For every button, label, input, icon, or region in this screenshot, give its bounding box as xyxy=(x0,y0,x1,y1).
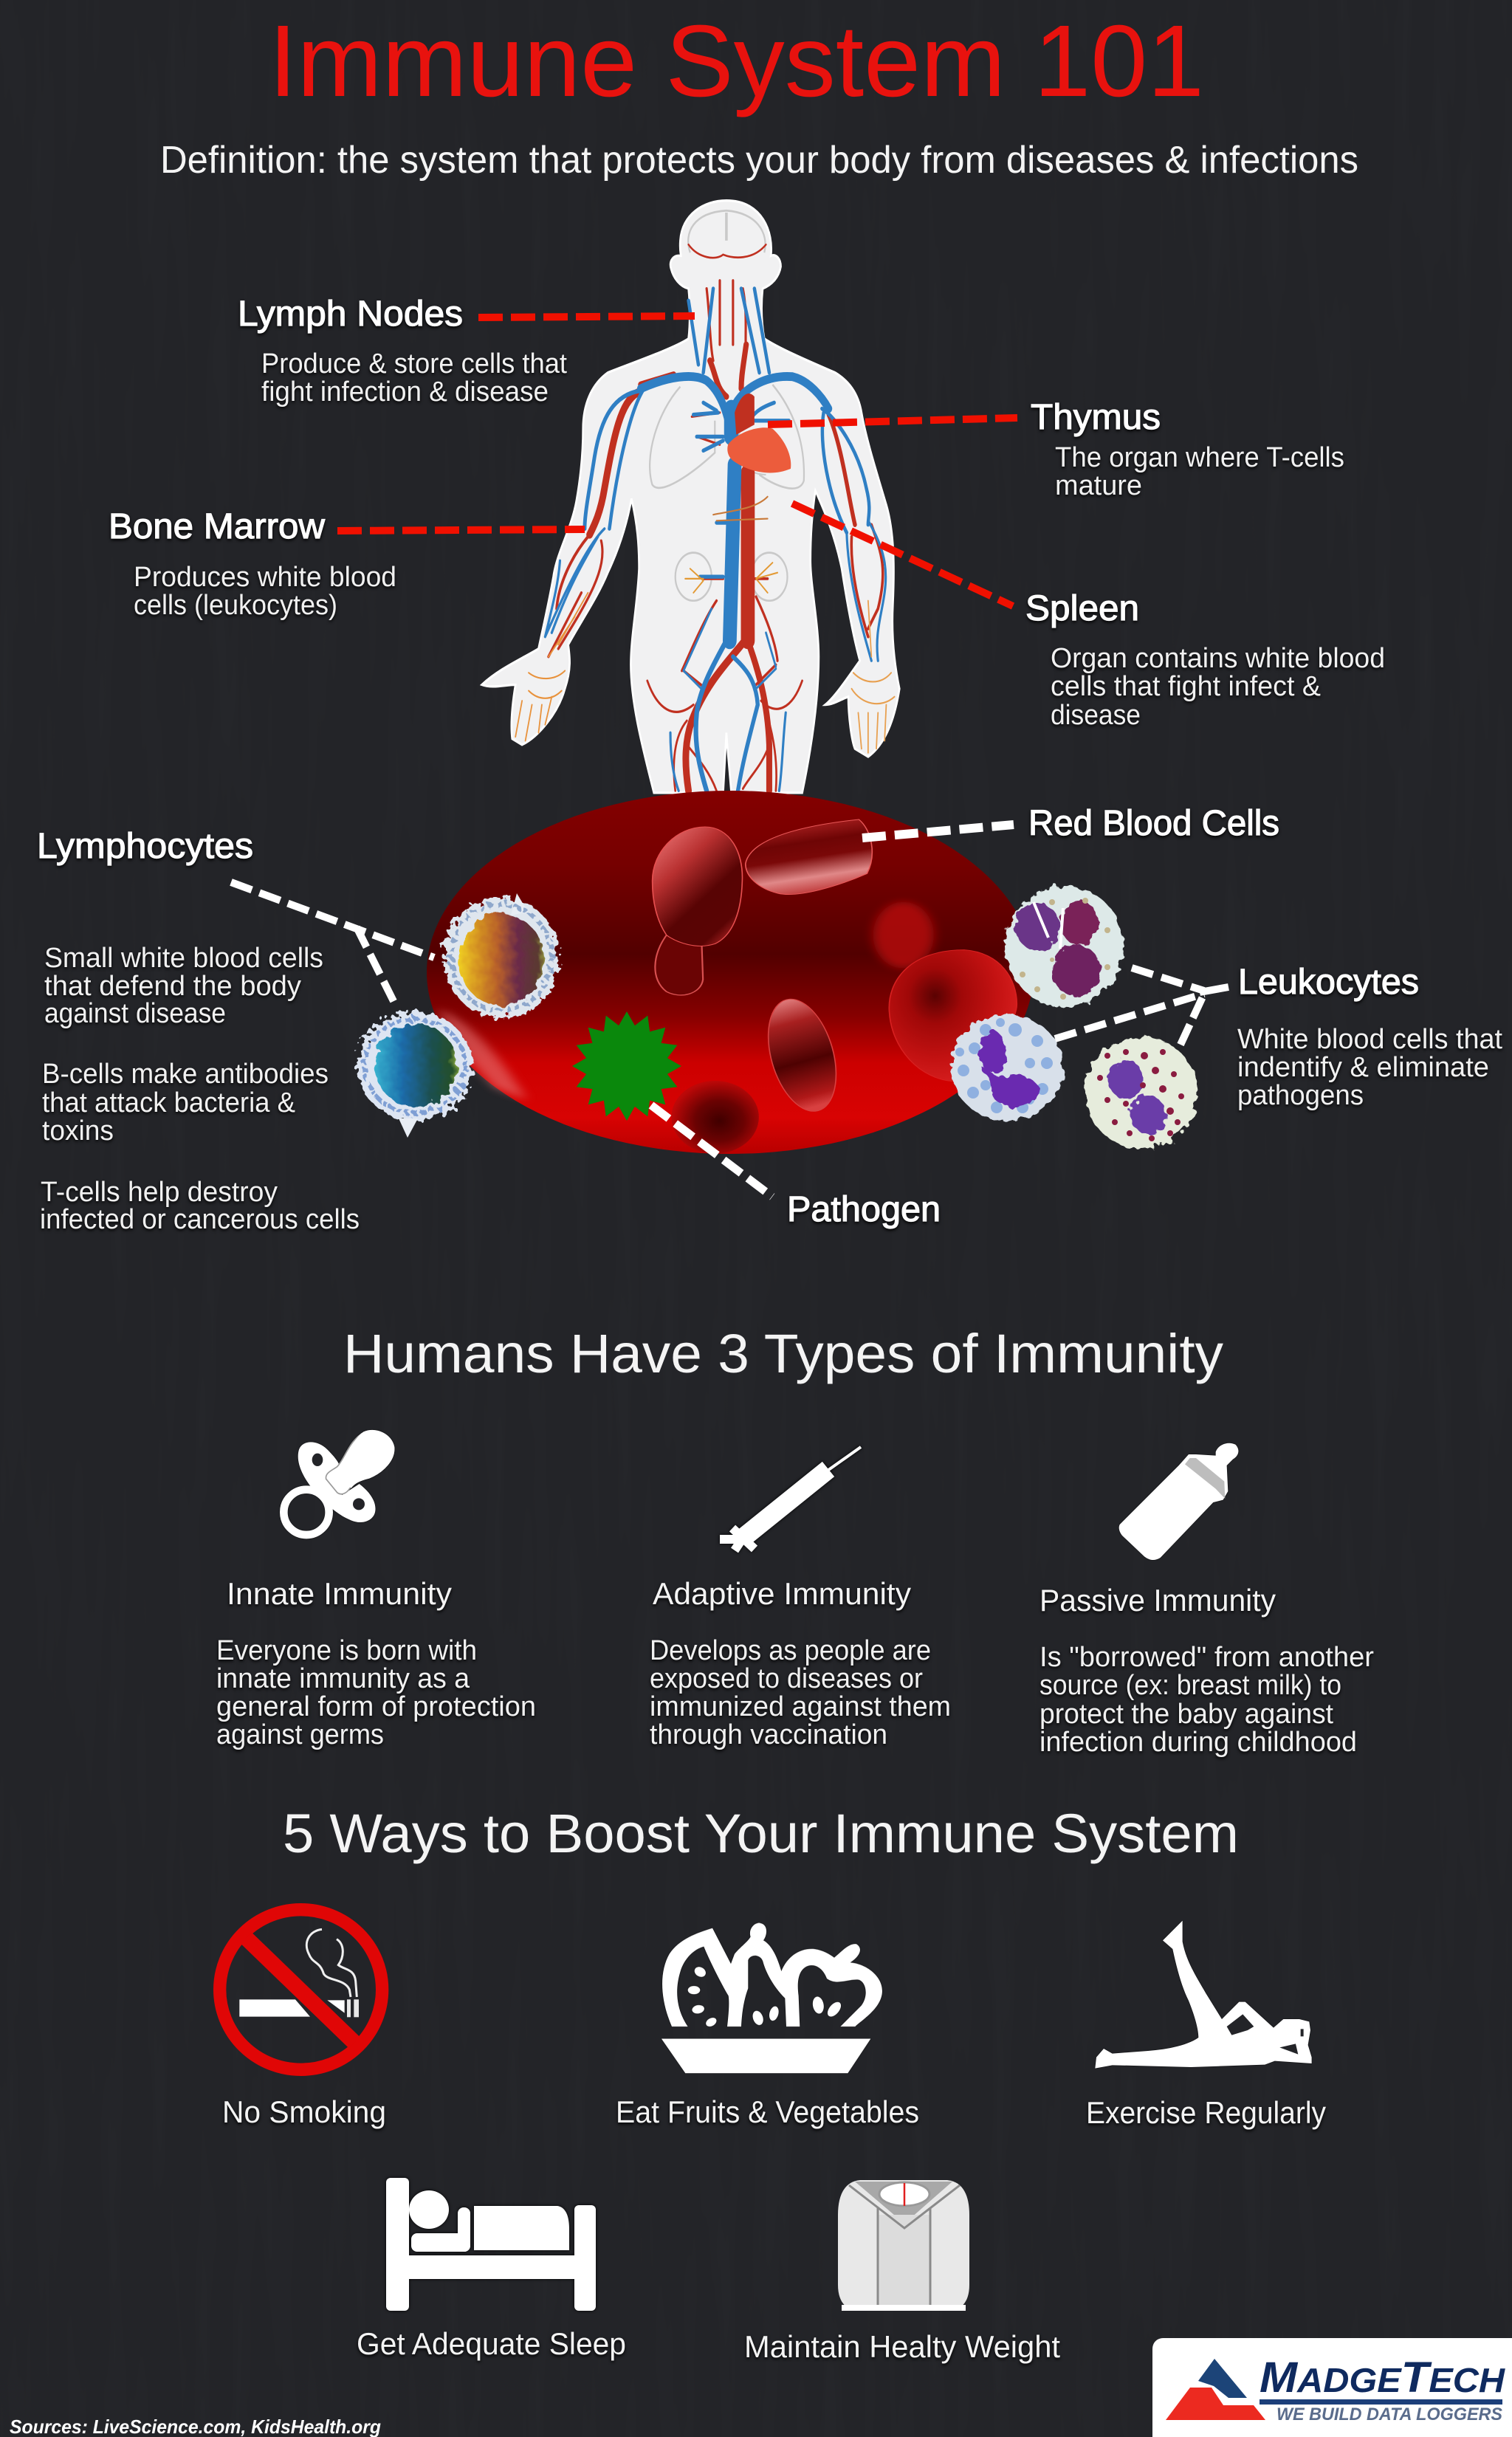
blood vessel cross-section xyxy=(427,791,1034,1154)
callout lines: lymphocytes xyxy=(231,882,434,1006)
label: lymphocytes: infected or cancerous cells xyxy=(40,1204,360,1235)
block: adaptive immunity: exposed to diseases or xyxy=(650,1663,923,1694)
label: leukocytes: pathogens xyxy=(1237,1080,1364,1111)
label: leukocytes: Leukocytes xyxy=(1238,963,1419,1002)
block: innate immunity xyxy=(216,1576,536,1750)
label: leukocytes xyxy=(1237,963,1502,1111)
red blood cell: upper right xyxy=(746,819,872,894)
block: innate immunity: Everyone is born with xyxy=(216,1635,477,1666)
logo: MadgeTech xyxy=(1152,2338,1512,2437)
label: lymph nodes xyxy=(238,295,567,408)
label: spleen xyxy=(1025,589,1385,731)
label: lymphocytes: that attack bacteria & xyxy=(42,1087,295,1118)
heart xyxy=(727,427,791,472)
block: innate immunity: Innate Immunity xyxy=(227,1576,452,1611)
callout line: lymph nodes xyxy=(478,316,695,317)
pathogen xyxy=(572,1011,681,1121)
label: lymphocytes: B-cells make antibodies xyxy=(42,1059,329,1090)
logo: MadgeTech: MADGETECH xyxy=(1260,2354,1505,2402)
lymphocyte: orange xyxy=(444,893,559,1018)
logo: MadgeTech: WE BUILD DATA LOGGERS xyxy=(1276,2405,1502,2424)
red blood cell: faint background xyxy=(873,902,934,969)
callout lines: leukocytes xyxy=(1055,968,1228,1045)
icon: syringe xyxy=(720,1447,861,1550)
block: innate immunity: against germs xyxy=(216,1719,384,1750)
block: passive immunity: Is "borrowed" from another xyxy=(1040,1642,1374,1673)
block: passive immunity: infection during childhood xyxy=(1040,1727,1357,1758)
title: Immune System 101 xyxy=(269,4,1204,118)
leukocyte: blue granules xyxy=(951,1014,1063,1121)
callout line: red blood cells xyxy=(862,825,1014,838)
label: lymphocytes xyxy=(37,827,360,1235)
red blood cell: bottom xyxy=(671,1081,759,1154)
callout line: thymus xyxy=(768,418,1017,425)
callout line: spleen xyxy=(792,503,1013,606)
label: thymus xyxy=(1031,398,1344,501)
icon: baby bottle xyxy=(1119,1443,1238,1560)
icon: bed xyxy=(386,2178,596,2311)
red blood cell: tail of tall cell xyxy=(655,935,703,995)
label: bone marrow: Bone Marrow xyxy=(109,507,325,546)
red blood cell: narrow xyxy=(758,997,846,1114)
label: lymphocytes: toxins xyxy=(42,1116,114,1147)
light streak lower left xyxy=(438,1009,527,1100)
icon: exercise silhouette xyxy=(1095,1921,1312,2069)
label: no smoking: No Smoking xyxy=(222,2094,386,2129)
label: lymphocytes: against disease xyxy=(44,998,226,1029)
block: passive immunity: Passive Immunity xyxy=(1040,1583,1276,1618)
label: bone marrow: cells (leukocytes) xyxy=(134,590,337,621)
label: lymph nodes: Produce & store cells that xyxy=(261,348,567,379)
block: passive immunity xyxy=(1040,1583,1374,1758)
leukocyte: purple lobes xyxy=(1006,886,1124,1007)
label: spleen: Organ contains white blood xyxy=(1051,643,1385,674)
callout line: bone marrow xyxy=(337,529,585,531)
block: adaptive immunity: through vaccination xyxy=(650,1719,887,1750)
icon: fruits and vegetables xyxy=(662,1923,882,2073)
label: maintain healthy weight: Maintain Healty Weight xyxy=(744,2329,1060,2364)
label: spleen: Spleen xyxy=(1025,589,1139,628)
red blood cell: large round xyxy=(889,950,1017,1082)
block: adaptive immunity: Develops as people are xyxy=(650,1635,931,1666)
callout line: pathogen xyxy=(651,1105,772,1197)
label: lymph nodes: Lymph Nodes xyxy=(238,295,463,334)
block: passive immunity: protect the baby against xyxy=(1040,1699,1333,1730)
block: adaptive immunity: Adaptive Immunity xyxy=(653,1576,911,1611)
block: passive immunity: source (ex: breast milk) to xyxy=(1040,1670,1341,1701)
label: leukocytes: indentify & eliminate xyxy=(1237,1052,1489,1083)
block: adaptive immunity: immunized against them xyxy=(650,1691,951,1722)
definition text: Definition: the system that protects your body from diseases & infections xyxy=(160,139,1358,182)
label: bone marrow: Produces white blood xyxy=(134,562,396,593)
label: get adequate sleep: Get Adequate Sleep xyxy=(357,2326,626,2361)
label: bone marrow xyxy=(109,507,396,621)
human body with circulatory system xyxy=(482,201,899,793)
label: red blood cells: Red Blood Cells xyxy=(1028,804,1279,843)
icon: pacifier xyxy=(284,1431,394,1535)
label: thymus: Thymus xyxy=(1031,398,1161,437)
label: pathogen: Pathogen xyxy=(787,1190,941,1229)
block: innate immunity: general form of protection xyxy=(216,1691,536,1722)
label: spleen: disease xyxy=(1051,700,1141,731)
block: adaptive immunity xyxy=(650,1576,951,1750)
label: exercise regularly: Exercise Regularly xyxy=(1086,2095,1326,2130)
heading: types of immunity: Humans Have 3 Types of Immunity xyxy=(343,1323,1223,1384)
label: leukocytes: White blood cells that xyxy=(1237,1024,1502,1055)
leukocyte: red granules xyxy=(1085,1037,1197,1149)
label: thymus: The organ where T-cells xyxy=(1055,442,1344,473)
icon: weighing scale xyxy=(838,2180,969,2311)
label: lymphocytes: T-cells help destroy xyxy=(41,1177,278,1208)
label: lymph nodes: fight infection & disease xyxy=(261,377,549,408)
label: lymphocytes: that defend the body xyxy=(44,971,301,1002)
label: eat fruits and vegetables: Eat Fruits & Vegetables xyxy=(616,2094,919,2129)
heading: boost immune system: 5 Ways to Boost Your Immune System xyxy=(283,1803,1239,1864)
label: lymphocytes: Lymphocytes xyxy=(37,827,253,866)
label: thymus: mature xyxy=(1055,470,1142,501)
block: innate immunity: innate immunity as a xyxy=(216,1663,470,1694)
label: spleen: cells that fight infect & xyxy=(1051,671,1321,702)
lymphocyte: blue xyxy=(357,1011,472,1138)
red blood cell: tall xyxy=(653,827,742,946)
label: lymphocytes: Small white blood cells xyxy=(44,943,323,974)
icon: no smoking xyxy=(220,1910,382,2069)
